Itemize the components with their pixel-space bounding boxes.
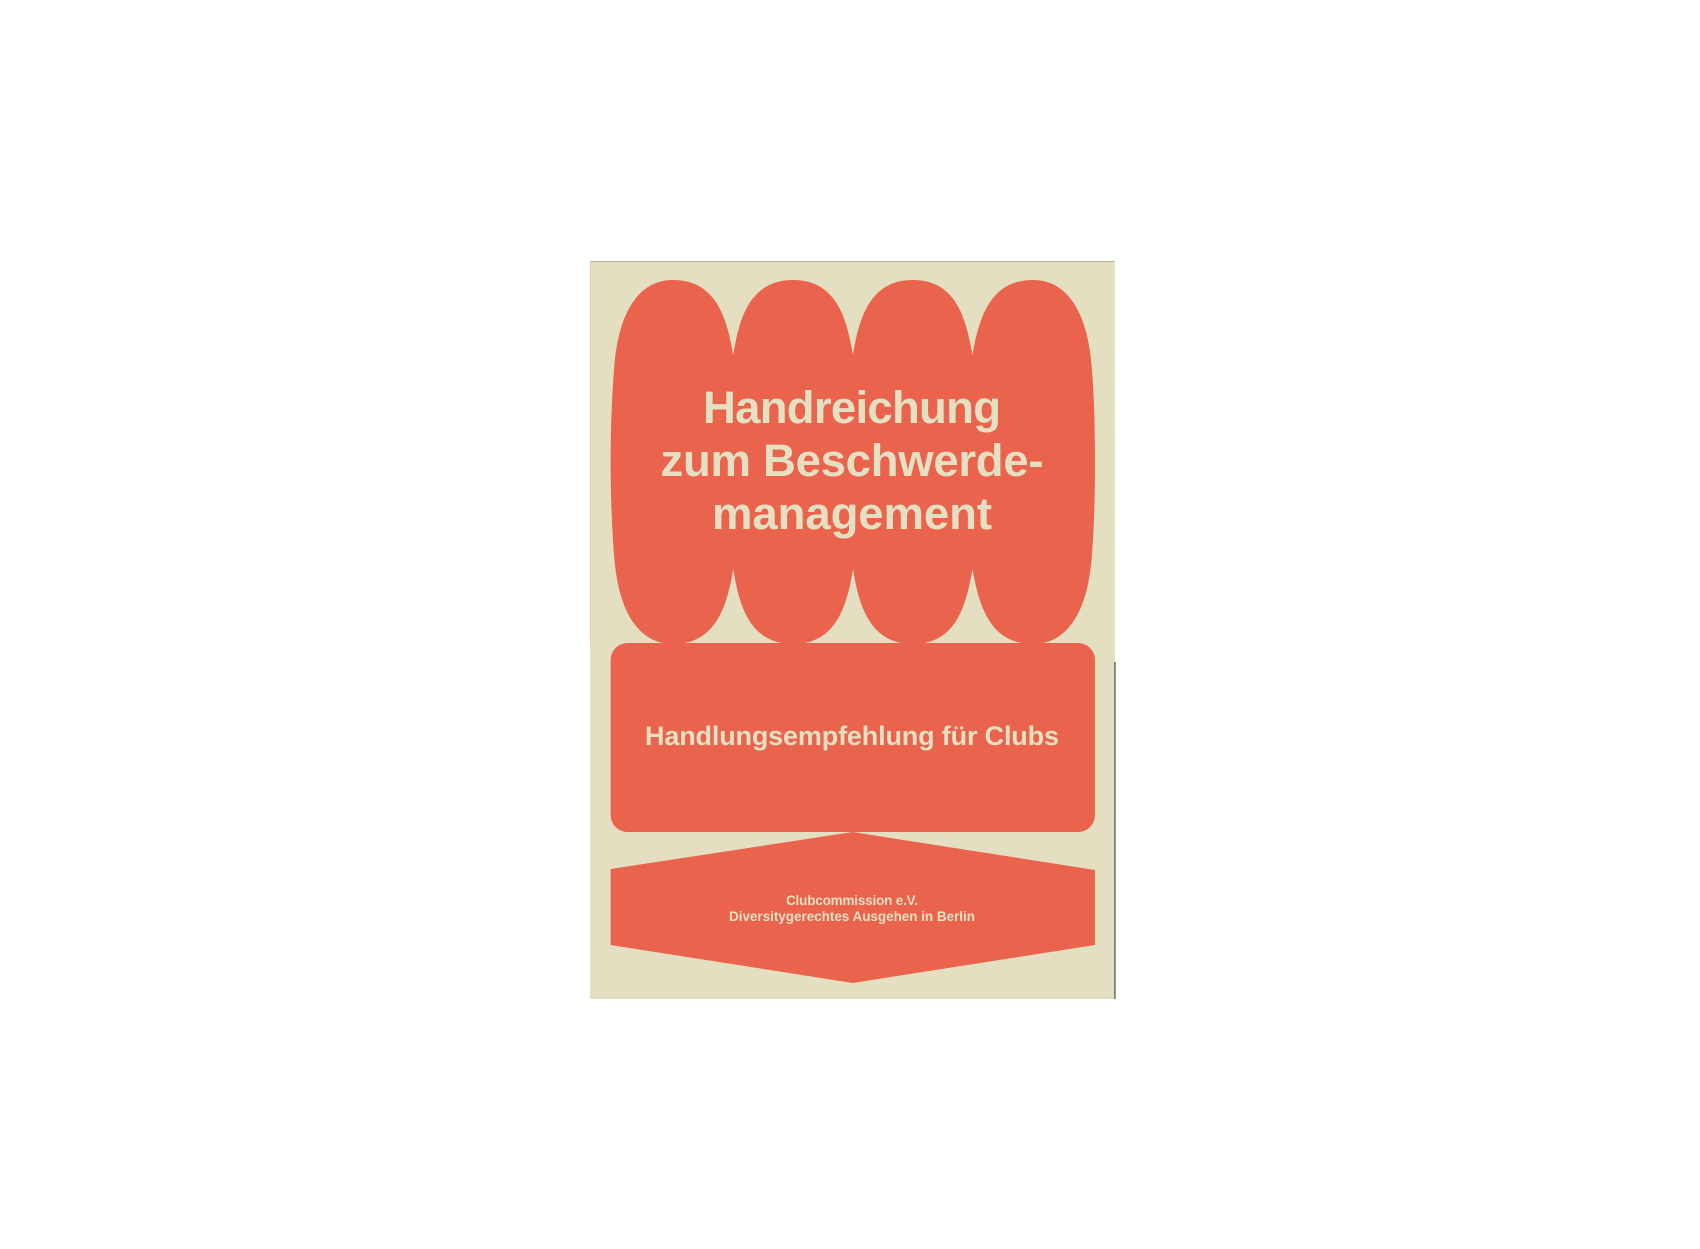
title	[660, 382, 1044, 539]
rounded panel with subtitle	[611, 643, 1095, 832]
scalloped shape: four joined ovals	[611, 280, 1095, 644]
hexagon panel with publisher text: Clubcommission e.V.	[786, 893, 918, 908]
hexagon panel with publisher text	[611, 832, 1095, 983]
title: zum Beschwerde-	[660, 435, 1044, 486]
brochure cover	[590, 261, 1116, 999]
title: management	[712, 488, 992, 539]
paper background	[590, 261, 1115, 999]
hexagon panel with publisher text: Diversitygerechtes Ausgehen in Berlin	[729, 909, 975, 924]
rounded panel with subtitle: Handlungsempfehlung für Clubs	[645, 721, 1059, 751]
title: Handreichung	[703, 382, 1001, 433]
